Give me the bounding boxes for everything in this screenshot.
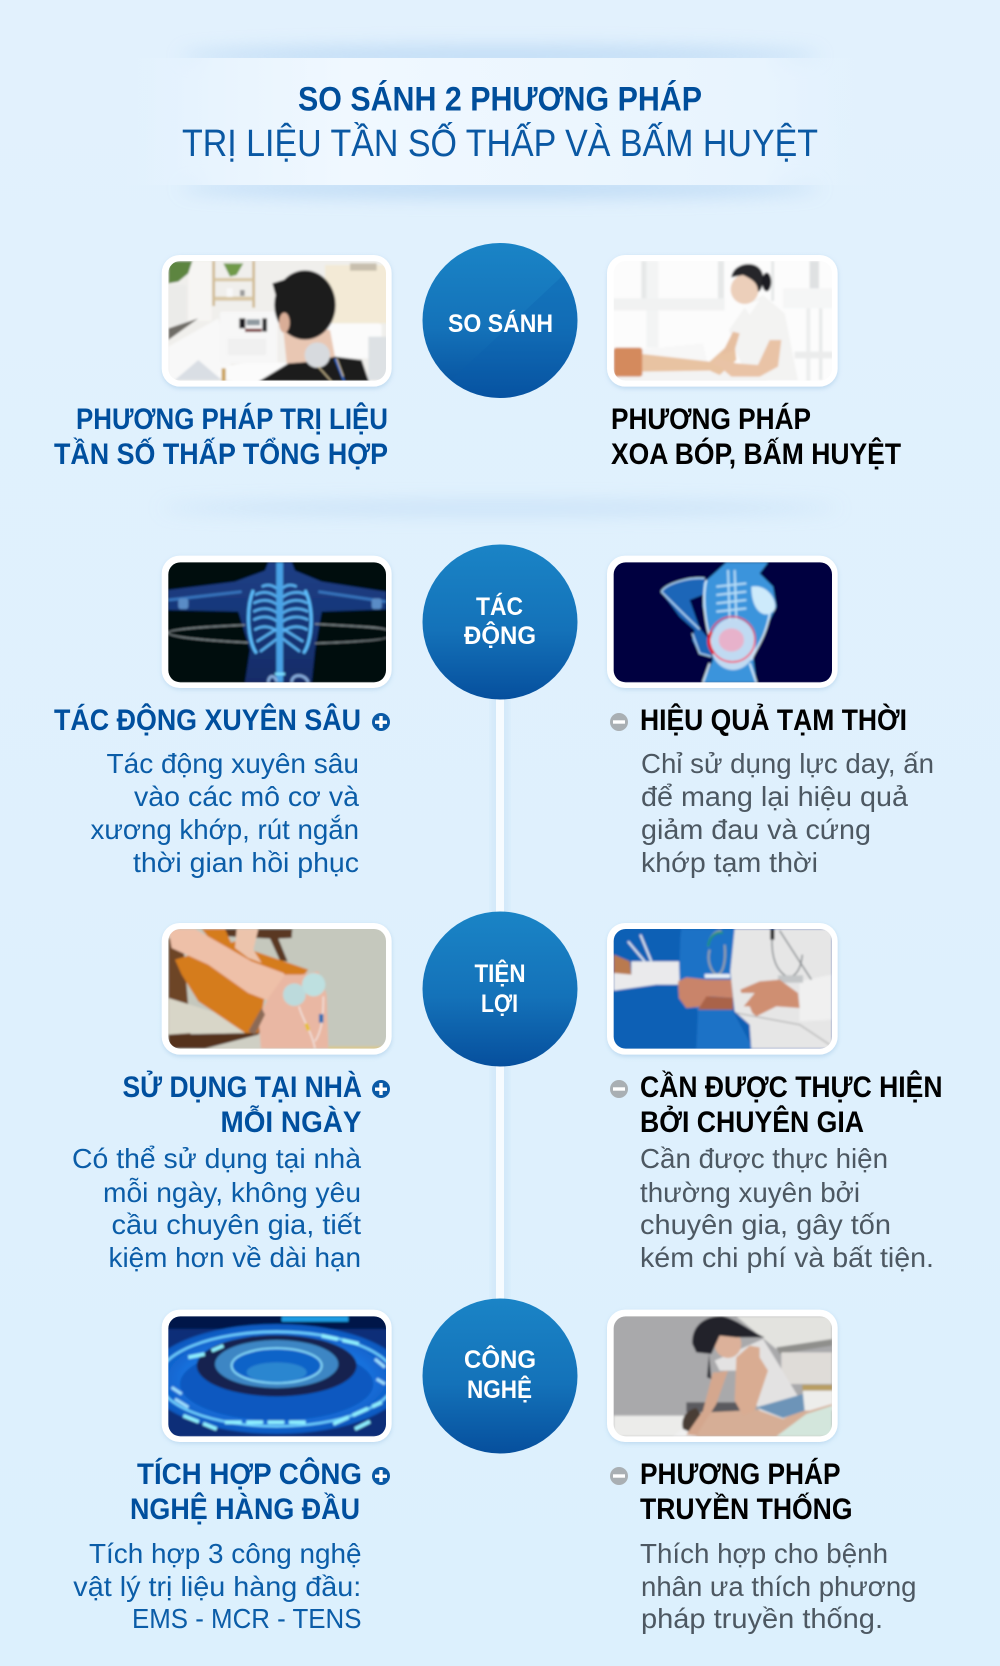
left description: mỗi ngày, không yêu	[103, 1177, 361, 1208]
right heading	[611, 402, 901, 471]
right heading with minus icon	[610, 1070, 942, 1139]
row: công nghệ	[73, 1298, 917, 1634]
left description: Có thể sử dụng tại nhà	[72, 1143, 361, 1174]
right description: chuyên gia, gây tốn	[640, 1209, 891, 1240]
right heading with minus icon: TRUYỀN THỐNG	[640, 1492, 852, 1526]
left heading: PHƯƠNG PHÁP TRỊ LIỆU	[76, 402, 388, 436]
right description: pháp truyền thống.	[641, 1603, 883, 1634]
right heading with minus icon: BỞI CHUYÊN GIA	[640, 1105, 864, 1139]
left description: Tích hợp 3 công nghệ	[89, 1538, 362, 1569]
right description	[641, 748, 934, 878]
right heading with minus icon: PHƯƠNG PHÁP	[640, 1457, 840, 1491]
right description: để mang lại hiệu quả	[641, 781, 908, 812]
right heading with minus icon	[610, 1457, 852, 1526]
right heading with minus icon: CẦN ĐƯỢC THỰC HIỆN	[640, 1070, 942, 1104]
left image card	[162, 556, 392, 689]
left heading with plus icon: TÍCH HỢP CÔNG	[137, 1457, 362, 1491]
title panel	[125, 46, 875, 197]
left image card	[147, 1310, 407, 1443]
right image card	[607, 1310, 838, 1443]
left heading	[54, 402, 388, 471]
right description	[640, 1538, 916, 1634]
left heading with plus icon	[122, 1070, 390, 1139]
left image card	[162, 255, 392, 389]
title line 1: SO SÁNH 2 PHƯƠNG PHÁP	[298, 80, 702, 118]
left description: vào các mô cơ và	[134, 781, 359, 812]
right description: Chỉ sử dụng lực day, ấn	[641, 748, 934, 779]
center badge	[422, 544, 578, 700]
left description	[73, 1538, 362, 1634]
right description: khớp tạm thời	[641, 847, 818, 878]
title line 2: TRỊ LIỆU TẦN SỐ THẤP VÀ BẤM HUYỆT	[182, 120, 818, 165]
center badge: ĐỘNG	[464, 620, 536, 650]
left heading: TẦN SỐ THẤP TỔNG HỢP	[54, 437, 388, 471]
left description	[72, 1143, 361, 1273]
left heading with plus icon: SỬ DỤNG TẠI NHÀ	[122, 1070, 362, 1104]
row: tiện lợi	[72, 912, 942, 1273]
center badge	[422, 243, 578, 398]
center badge: NGHỆ	[467, 1374, 532, 1404]
right heading: XOA BÓP, BẤM HUYỆT	[611, 437, 901, 471]
center badge: TIỆN	[474, 958, 526, 988]
left image card	[162, 923, 392, 1057]
left heading with plus icon: TÁC ĐỘNG XUYÊN SÂU	[54, 703, 361, 737]
left description: Tác động xuyên sâu	[106, 748, 359, 779]
timeline connector	[491, 690, 509, 1310]
left description: cầu chuyên gia, tiết	[112, 1209, 361, 1240]
right image card	[607, 255, 838, 389]
left description: vật lý trị liệu hàng đầu:	[73, 1571, 361, 1602]
right description: nhân ưa thích phương	[641, 1571, 916, 1602]
right image card	[607, 923, 838, 1057]
center badge	[422, 1298, 578, 1454]
right description: giảm đau và cứng	[641, 814, 871, 845]
right image card	[607, 556, 838, 689]
right description: Thích hợp cho bệnh	[640, 1538, 888, 1569]
left description: xương khớp, rút ngắn	[90, 814, 359, 845]
left heading with plus icon	[130, 1457, 390, 1526]
right description	[640, 1143, 934, 1273]
center badge: CÔNG	[464, 1344, 536, 1374]
right description: Cần được thực hiện	[640, 1143, 888, 1174]
left description: kiệm hơn về dài hạn	[108, 1242, 361, 1273]
center badge: LỢI	[481, 990, 518, 1018]
center badge: SO SÁNH	[448, 309, 553, 338]
right heading with minus icon: HIỆU QUẢ TẠM THỜI	[640, 703, 907, 737]
right heading: PHƯƠNG PHÁP	[611, 402, 811, 436]
left heading with plus icon: NGHỆ HÀNG ĐẦU	[130, 1492, 360, 1526]
right description: thường xuyên bởi	[640, 1177, 860, 1208]
left description: EMS - MCR - TENS	[132, 1603, 362, 1634]
center badge	[422, 912, 578, 1066]
center badge: TÁC	[476, 592, 523, 621]
left heading with plus icon: MỖI NGÀY	[220, 1105, 362, 1139]
row: so sánh	[54, 243, 901, 471]
right description: kém chi phí và bất tiện.	[640, 1242, 934, 1273]
row: tác động	[54, 544, 934, 878]
left description	[90, 748, 359, 878]
left description: thời gian hồi phục	[133, 847, 359, 878]
